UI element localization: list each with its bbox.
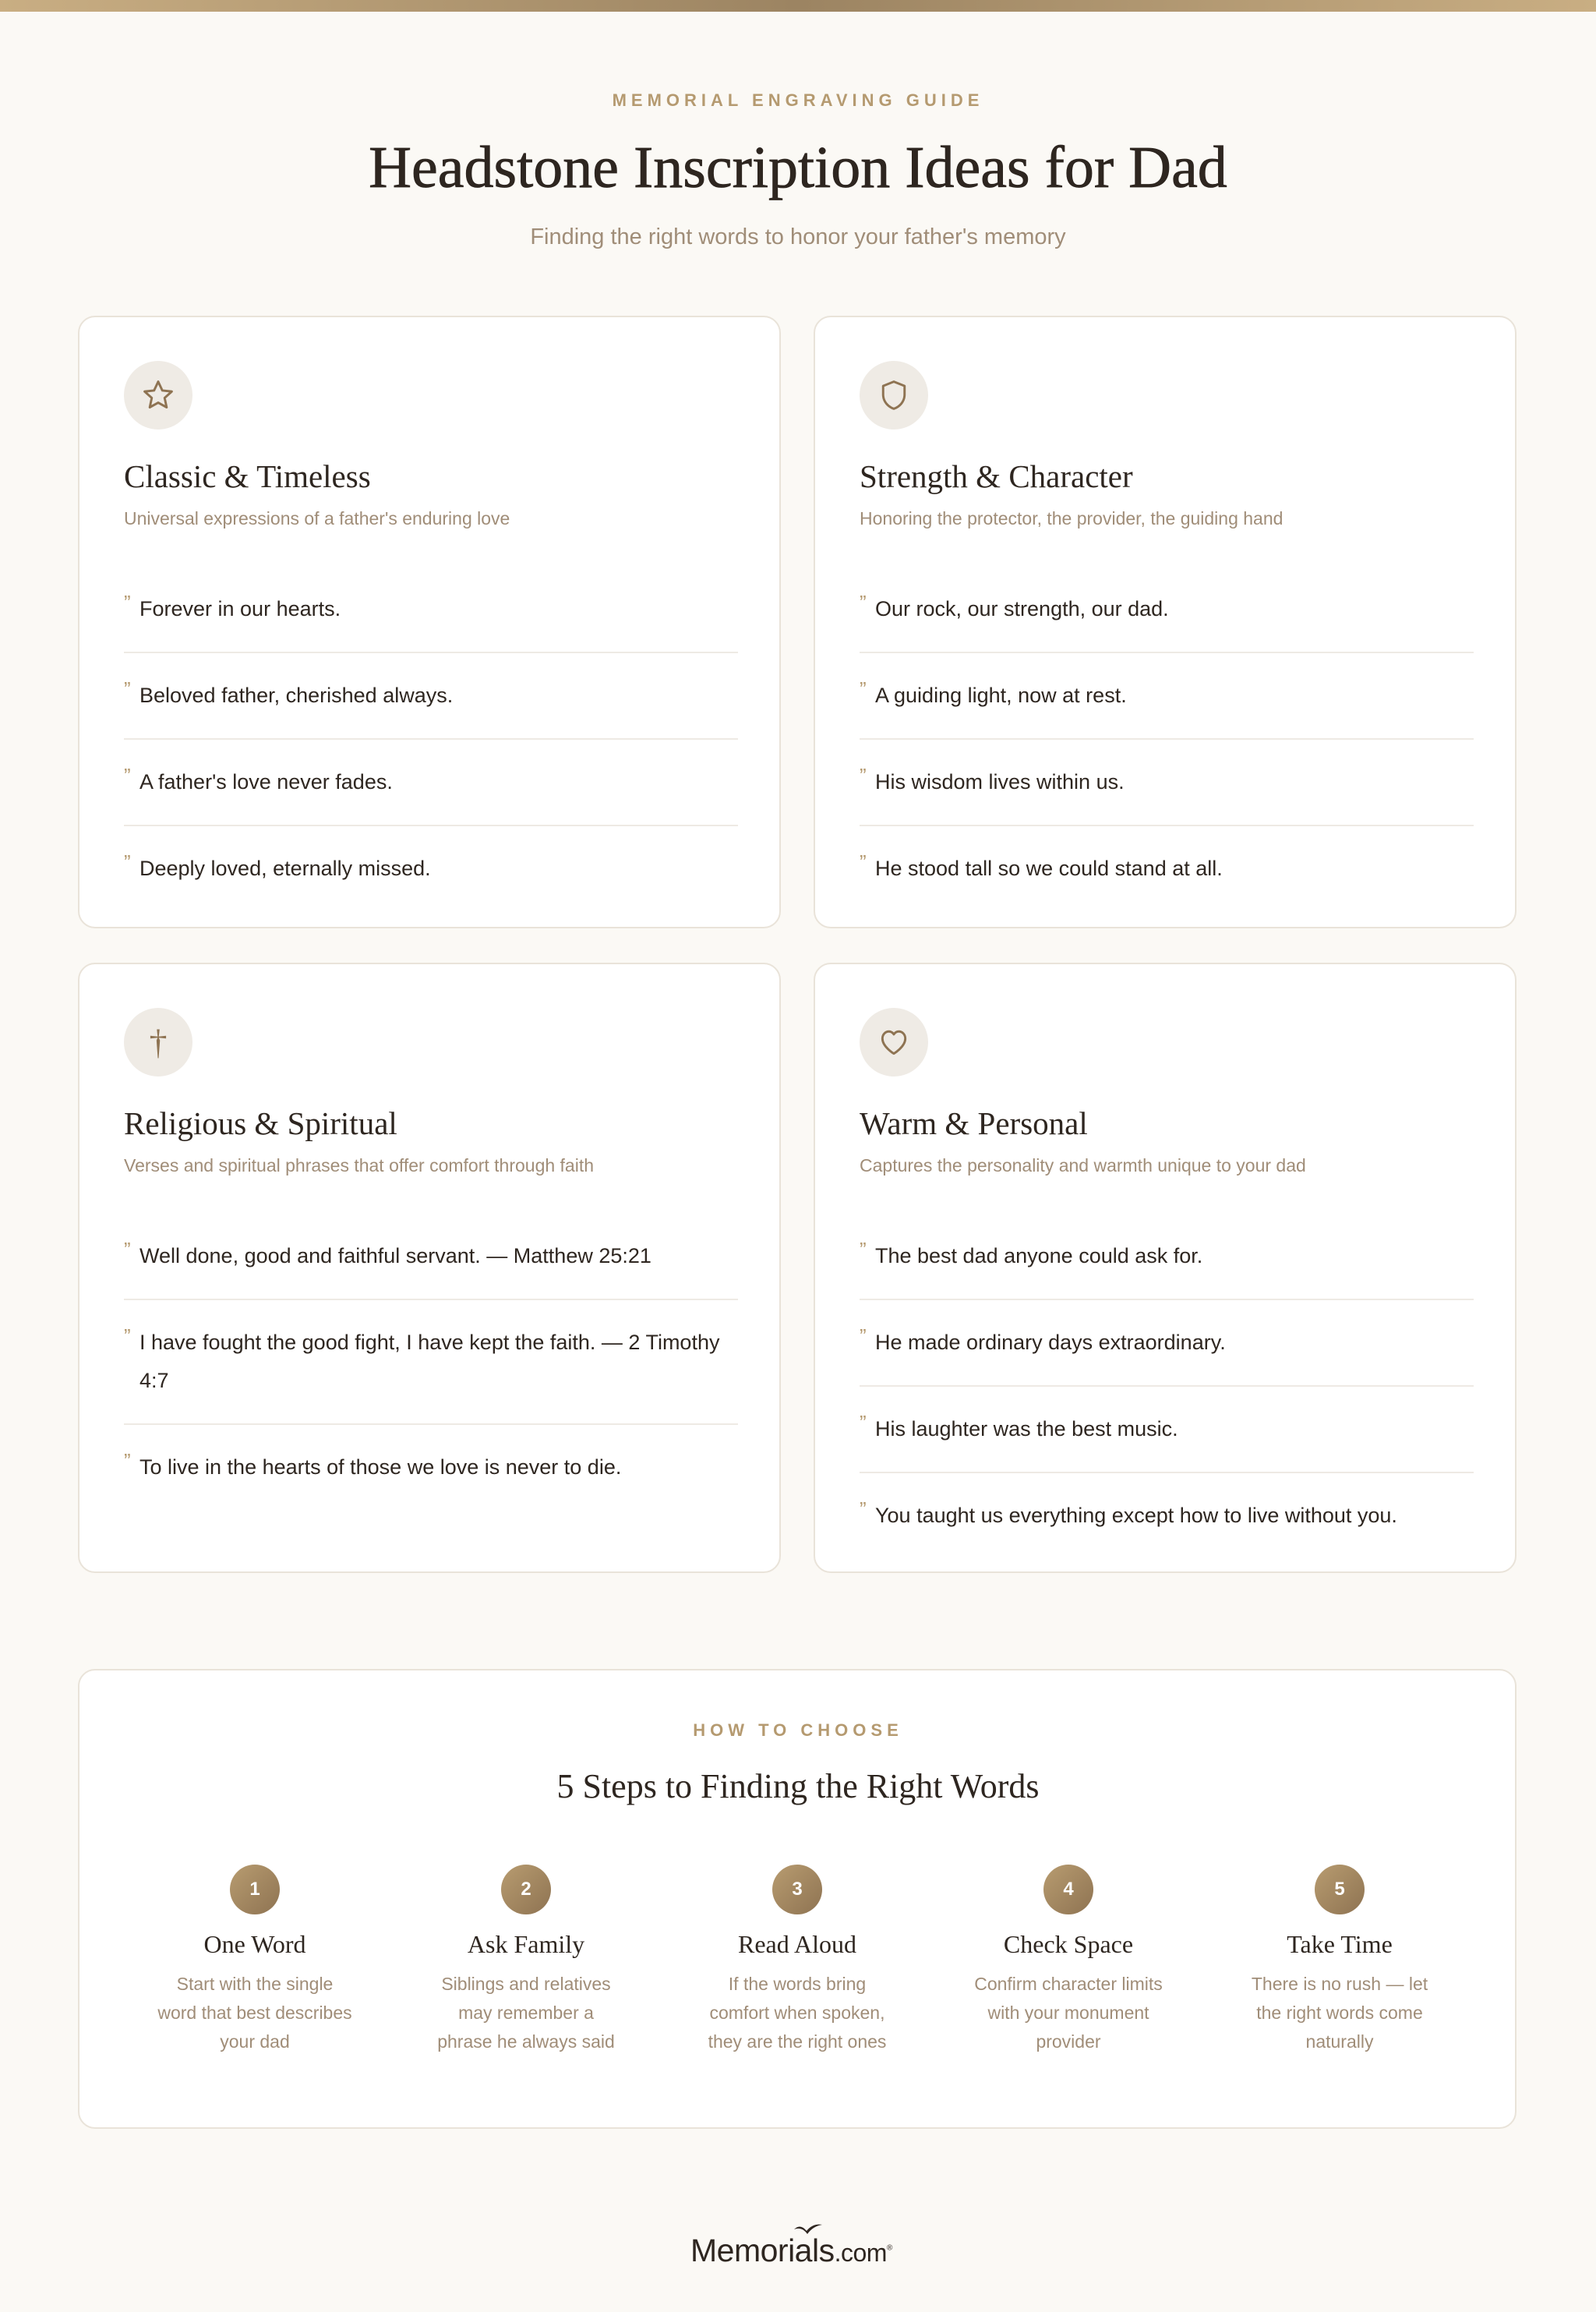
step 1 bbox=[157, 1865, 352, 2052]
step 1: 1 bbox=[249, 1879, 260, 1900]
step 3: If the words bring comfort when spoken, they are the right ones bbox=[708, 1974, 886, 2052]
quote list: His laughter was the best music. bbox=[875, 1417, 1178, 1441]
quote list: Forever in our hearts. bbox=[139, 597, 341, 620]
step 1: Start with the single word that best describes your dad bbox=[157, 1974, 352, 2052]
icon: heart bbox=[860, 1008, 928, 1076]
icon: cross: † bbox=[150, 1022, 167, 1062]
quote list: His wisdom lives within us. bbox=[875, 770, 1125, 794]
step 2: Ask Family bbox=[468, 1930, 584, 1958]
description: Honoring the protector, the provider, the guiding hand bbox=[860, 508, 1283, 529]
step 3: Read Aloud bbox=[738, 1930, 856, 1958]
step 2 bbox=[437, 1865, 615, 2052]
quote list: A father's love never fades. bbox=[139, 770, 393, 794]
quote list bbox=[860, 596, 1474, 880]
quote list: He made ordinary days extraordinary. bbox=[875, 1331, 1226, 1354]
quote list bbox=[860, 1243, 1474, 1527]
description: Verses and spiritual phrases that offer comfort through faith bbox=[124, 1155, 594, 1175]
step 2: Siblings and relatives may remember a phrase he always said bbox=[437, 1974, 615, 2052]
step 4: Confirm character limits with your monument provider bbox=[974, 1974, 1163, 2052]
subtitle: Finding the right words to honor your father's memory bbox=[530, 224, 1066, 249]
quote list: Well done, good and faithful servant. — Matthew 25:21 bbox=[139, 1244, 651, 1267]
quote list: He stood tall so we could stand at all. bbox=[875, 857, 1223, 880]
quote list: The best dad anyone could ask for. bbox=[875, 1244, 1202, 1267]
quote list: Deeply loved, eternally missed. bbox=[139, 857, 431, 880]
panel: religious & spiritual bbox=[78, 963, 781, 1573]
step 4: 4 bbox=[1063, 1879, 1074, 1900]
quote list: A guiding light, now at rest. bbox=[875, 684, 1127, 707]
step 4: Check Space bbox=[1004, 1930, 1133, 1958]
heading: Strength & Character bbox=[860, 458, 1133, 494]
eyebrow: how to choose: HOW TO CHOOSE bbox=[693, 1720, 903, 1740]
quote list bbox=[124, 1243, 738, 1479]
step 5 bbox=[1252, 1865, 1428, 2052]
step 1: One Word bbox=[203, 1930, 306, 1958]
quote list: You taught us everything except how to live without you. bbox=[875, 1504, 1397, 1527]
quote list bbox=[124, 596, 738, 880]
quote list: Our rock, our strength, our dad. bbox=[875, 597, 1169, 620]
icon: star bbox=[124, 361, 192, 430]
panel: classic & timeless bbox=[78, 316, 781, 928]
heading: Warm & Personal bbox=[860, 1105, 1088, 1141]
panel: warm & personal bbox=[814, 963, 1517, 1573]
quote list: To live in the hearts of those we love is never to die. bbox=[139, 1455, 621, 1479]
step 3 bbox=[708, 1865, 886, 2052]
quote list: Beloved father, cherished always. bbox=[139, 684, 453, 707]
step 4 bbox=[974, 1865, 1163, 2052]
steps heading: 5 Steps to Finding the Right Words bbox=[556, 1767, 1040, 1805]
panel: strength & character bbox=[814, 316, 1517, 928]
heading: Religious & Spiritual bbox=[124, 1105, 397, 1141]
icon: cross bbox=[124, 1008, 192, 1076]
step 2: 2 bbox=[521, 1879, 531, 1900]
heading: Classic & Timeless bbox=[124, 458, 371, 494]
step 3: 3 bbox=[792, 1879, 803, 1900]
top accent bar bbox=[0, 0, 1596, 12]
icon: shield bbox=[860, 361, 928, 430]
title: Headstone Inscription Ideas for Dad bbox=[369, 135, 1227, 200]
step 5: There is no rush — let the right words come naturally bbox=[1252, 1974, 1428, 2052]
description: Universal expressions of a father's enduring love bbox=[124, 508, 510, 529]
quote list: I have fought the good fight, I have kept the faith. — 2 Timothy 4:7 bbox=[139, 1331, 719, 1392]
eyebrow: memorial engraving guide: MEMORIAL ENGRAVING GUIDE bbox=[613, 90, 983, 110]
step 5: 5 bbox=[1334, 1879, 1345, 1900]
panel: how to choose bbox=[78, 1669, 1517, 2129]
description: Captures the personality and warmth unique to your dad bbox=[860, 1155, 1306, 1175]
step 5: Take Time bbox=[1287, 1930, 1393, 1958]
logo: memorials.com: Memorials.com® bbox=[690, 2232, 892, 2268]
